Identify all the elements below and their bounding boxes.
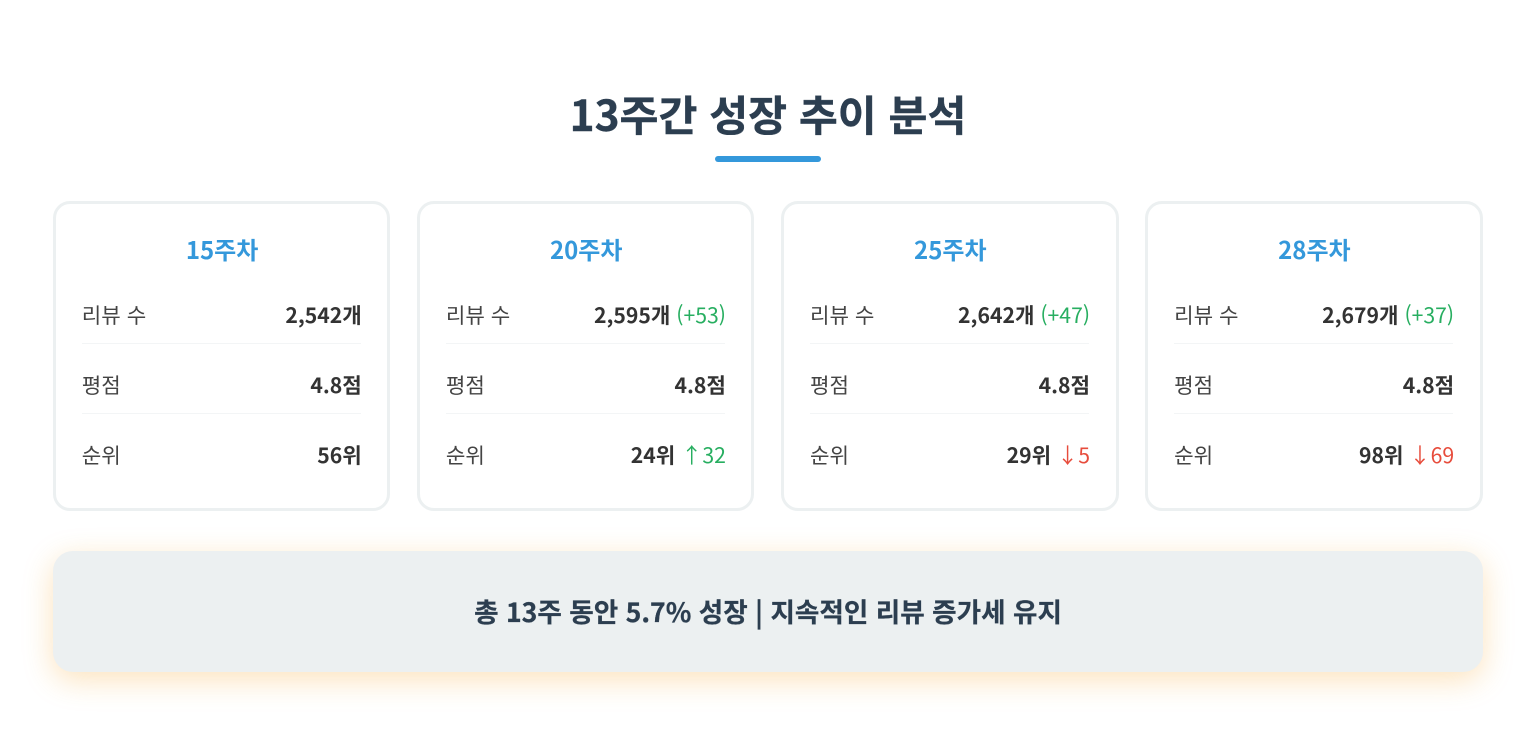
week 25 rating [810, 357, 1089, 414]
callout: summary [53, 551, 1483, 672]
week 20 rank [446, 439, 726, 470]
week 25 rating: 4.8점 [1039, 369, 1090, 400]
week 20 review count: 리뷰 수 [446, 299, 510, 330]
week 28 review count: 2,679개 (+37) [1322, 299, 1454, 330]
week 15 review count: 2,542개 [285, 299, 362, 330]
week 15 rank: 56위 [317, 439, 362, 470]
week 15 rating: 평점 [82, 369, 121, 400]
week 25 rating: 평점 [810, 369, 849, 400]
week 28 rank [1174, 439, 1454, 470]
title underline [715, 156, 821, 162]
week 25 review count: 리뷰 수 [810, 299, 874, 330]
week 20 rating: 4.8점 [674, 369, 726, 400]
title: 13주간 성장 추이 분석 [570, 83, 966, 144]
week 28 rank: 순위 [1174, 439, 1213, 470]
week 25 rank: 순위 [810, 439, 849, 470]
week 20 review count [446, 287, 725, 344]
week 25 rank [810, 439, 1090, 470]
week 25 heading: 25주차 [914, 231, 987, 266]
week 15 rating [82, 357, 361, 414]
panel: week 28 [1145, 201, 1483, 511]
week 20 rank: 24위 ↑32 [631, 439, 726, 470]
week 15 review count [82, 287, 361, 344]
week 28 rating: 4.8점 [1403, 369, 1454, 400]
week 28 rank: 98위 ↓69 [1359, 439, 1454, 470]
week 15 rating: 4.8점 [310, 369, 362, 400]
callout: summary: 총 13주 동안 5.7% 성장 | 지속적인 리뷰 증가세 유지 [474, 591, 1062, 630]
week 28 rating [1174, 357, 1453, 414]
week 28 review count [1174, 287, 1453, 344]
week 25 rank: 29위 ↓5 [1007, 439, 1090, 470]
week 28 heading: 28주차 [1278, 231, 1351, 266]
week 28 rating: 평점 [1174, 369, 1213, 400]
week 20 rating [446, 357, 725, 414]
week 25 review count [810, 287, 1089, 344]
week 28 review count: 리뷰 수 [1174, 299, 1239, 330]
panel: week 20 [417, 201, 754, 511]
week 20 review count: 2,595개 (+53) [594, 299, 726, 330]
week 25 review count: 2,642개 (+47) [958, 299, 1090, 330]
week 15 heading: 15주차 [186, 231, 258, 266]
panel: week 25 [781, 201, 1119, 511]
week 20 heading: 20주차 [550, 231, 622, 266]
week 15 rank: 순위 [82, 439, 121, 470]
week 20 rank: 순위 [446, 439, 485, 470]
week 20 rating: 평점 [446, 369, 485, 400]
week 15 review count: 리뷰 수 [82, 299, 146, 330]
week 15 rank [82, 439, 362, 470]
panel: week 15 [53, 201, 390, 511]
